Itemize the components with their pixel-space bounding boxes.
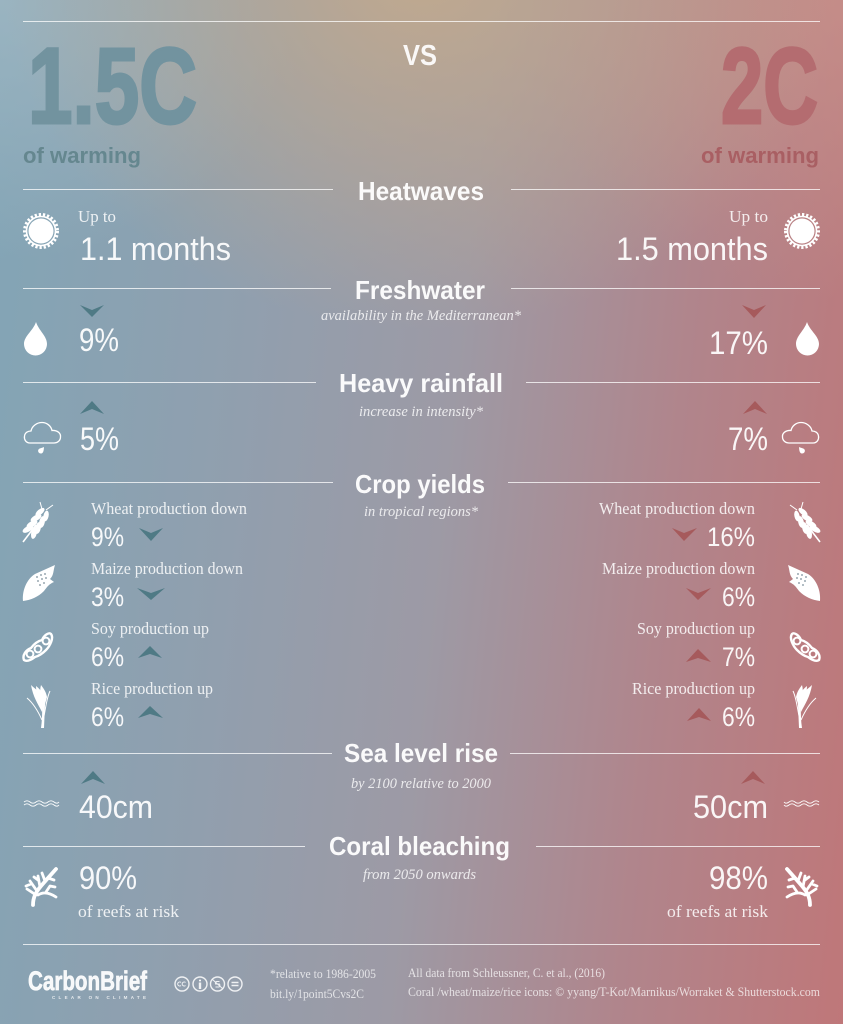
row: soy 1.5C — [91, 619, 209, 672]
text: 2C heatwaves: 1.5 months — [616, 231, 768, 267]
panel: heatwaves — [25, 176, 818, 267]
text: 90% of reefs — [78, 860, 180, 921]
row: wheat 2C: Wheat production down — [599, 499, 755, 518]
panel: freshwater — [24, 275, 819, 361]
icon: drop left — [24, 322, 47, 356]
text: sources: All data from Schleussner, C. et al., (2016) — [408, 966, 605, 980]
heading: Coral bleaching — [329, 831, 510, 883]
row: wheat 1.5C: 9% — [91, 522, 124, 552]
row: soy 2C — [637, 619, 755, 672]
panel: heavy rainfall — [24, 368, 819, 457]
icon: soy left — [23, 633, 52, 661]
heading: Heatwaves: Heatwaves — [358, 176, 484, 206]
panel: crop yields — [21, 469, 822, 732]
row: maize 2C — [602, 559, 755, 612]
value: 50cm: 50cm — [693, 789, 768, 825]
text: 90% of reefs: 90% — [79, 860, 137, 896]
icon: drop right — [796, 322, 819, 356]
heading: Crop yields — [355, 469, 485, 520]
icon: cloud right — [782, 422, 819, 454]
icon: wheat left — [21, 502, 53, 542]
row: rice 2C — [632, 679, 755, 732]
heading: Freshwater — [321, 275, 522, 324]
text: 90% of reefs: of reefs at risk — [78, 902, 180, 921]
footer — [28, 966, 820, 1001]
logo: Carbon Brief — [28, 966, 148, 1000]
row: wheat 2C: 16% — [707, 522, 755, 552]
icon: coral right — [787, 869, 817, 905]
text: 1.5C heatwaves: 1.1 months — [80, 231, 231, 267]
arrow: up right — [743, 401, 767, 414]
text: footnote — [270, 967, 376, 1001]
heading: Heavy rainfall — [339, 368, 503, 420]
text: footnote: *relative to 1986-2005 — [270, 967, 376, 981]
text: 2C heatwaves — [616, 207, 768, 267]
text: footnote: bit.ly/1point5Cvs2C — [270, 987, 364, 1001]
logo: Carbon Brief: CarbonBrief — [28, 966, 148, 996]
text: 1.5C heatwaves — [78, 207, 231, 267]
value: 5%: 5% — [80, 421, 119, 457]
arrow: down right — [742, 305, 766, 318]
heading: Coral bleaching: Coral bleaching — [329, 831, 510, 861]
icon: sun left — [25, 215, 57, 247]
row: maize 1.5C — [91, 559, 243, 612]
row: wheat 1.5C: Wheat production down — [91, 499, 247, 518]
heading: Freshwater: availability in the Mediterranean* — [321, 308, 522, 324]
row: rice 2C: 6% — [722, 702, 755, 732]
panel: sea level rise — [24, 738, 819, 825]
value: 40cm: 40cm — [79, 789, 153, 825]
row: maize 2C: 6% — [722, 582, 755, 612]
row: maize 1.5C: 3% — [91, 582, 124, 612]
row: soy 2C: Soy production up — [637, 619, 755, 638]
value: 7%: 7% — [728, 421, 768, 457]
row: soy 1.5C: 6% — [91, 642, 124, 672]
text: 1.5C heatwaves: Up to — [78, 207, 116, 226]
icon: wheat right — [790, 502, 822, 542]
heading: Heavy rainfall: Heavy rainfall — [339, 368, 503, 398]
row: rice 2C: Rice production up — [632, 679, 755, 698]
row: wheat 1.5C — [91, 499, 247, 552]
title: 1.5C of warming: 1.5C — [28, 25, 197, 146]
heading: Heavy rainfall: increase in intensity* — [359, 404, 484, 420]
panel: coral bleaching — [26, 831, 817, 921]
icon: cloud left — [24, 422, 61, 454]
heading: Freshwater: Freshwater — [355, 275, 485, 305]
text: sources — [408, 966, 820, 999]
arrow: down left — [80, 305, 104, 317]
row: soy 1.5C: Soy production up — [91, 619, 209, 638]
row: rice 1.5C — [91, 679, 213, 732]
logo: Carbon Brief: CLEAR ON CLIMATE — [52, 995, 146, 1000]
heading: Sea level rise: Sea level rise — [344, 738, 498, 768]
icon: sun right — [786, 215, 818, 247]
icon: soy right — [791, 633, 820, 661]
title: VS: VS — [403, 40, 437, 72]
row: soy 2C: 7% — [722, 642, 755, 672]
arrow: up left — [81, 771, 105, 784]
title: 1.5C of warming — [23, 25, 197, 168]
value: 17%: 17% — [709, 325, 768, 361]
text: sources: Coral /wheat/maize/rice icons: © yyang/T-Kot/Marnikus/Worraket & Shutterstock.com — [408, 985, 820, 999]
title: 2C of warming: of warming — [701, 143, 819, 168]
title: 2C of warming — [701, 25, 819, 168]
title: 1.5C of warming: of warming — [23, 143, 141, 168]
icon: maize left — [23, 565, 55, 601]
text: 2C heatwaves: Up to — [729, 207, 768, 226]
icon: rice left — [27, 685, 50, 728]
heading: Crop yields: Crop yields — [355, 469, 485, 499]
heading: Coral bleaching: from 2050 onwards — [363, 867, 476, 883]
heading: Sea level rise — [344, 738, 498, 792]
text: 98% of reefs: of reefs at risk — [667, 902, 769, 921]
icon: creative commons — [175, 977, 242, 991]
row: maize 2C: Maize production down — [602, 559, 755, 578]
icon: waves right — [784, 801, 819, 806]
row: wheat 2C — [599, 499, 755, 552]
text: 98% of reefs — [667, 860, 769, 921]
value: 9%: 9% — [79, 322, 119, 358]
heading: Crop yields: in tropical regions* — [364, 504, 479, 520]
text: 98% of reefs: 98% — [709, 860, 768, 896]
icon: waves left — [24, 801, 59, 806]
icon: coral left — [26, 869, 56, 905]
icon: rice right — [793, 685, 816, 728]
row: maize 1.5C: Maize production down — [91, 559, 243, 578]
row: rice 1.5C: Rice production up — [91, 679, 213, 698]
arrow: up left — [80, 401, 104, 414]
arrow: up right — [741, 771, 765, 784]
icon: maize right — [788, 565, 820, 601]
heading: Sea level rise: by 2100 relative to 2000 — [351, 776, 492, 792]
row: rice 1.5C: 6% — [91, 702, 124, 732]
